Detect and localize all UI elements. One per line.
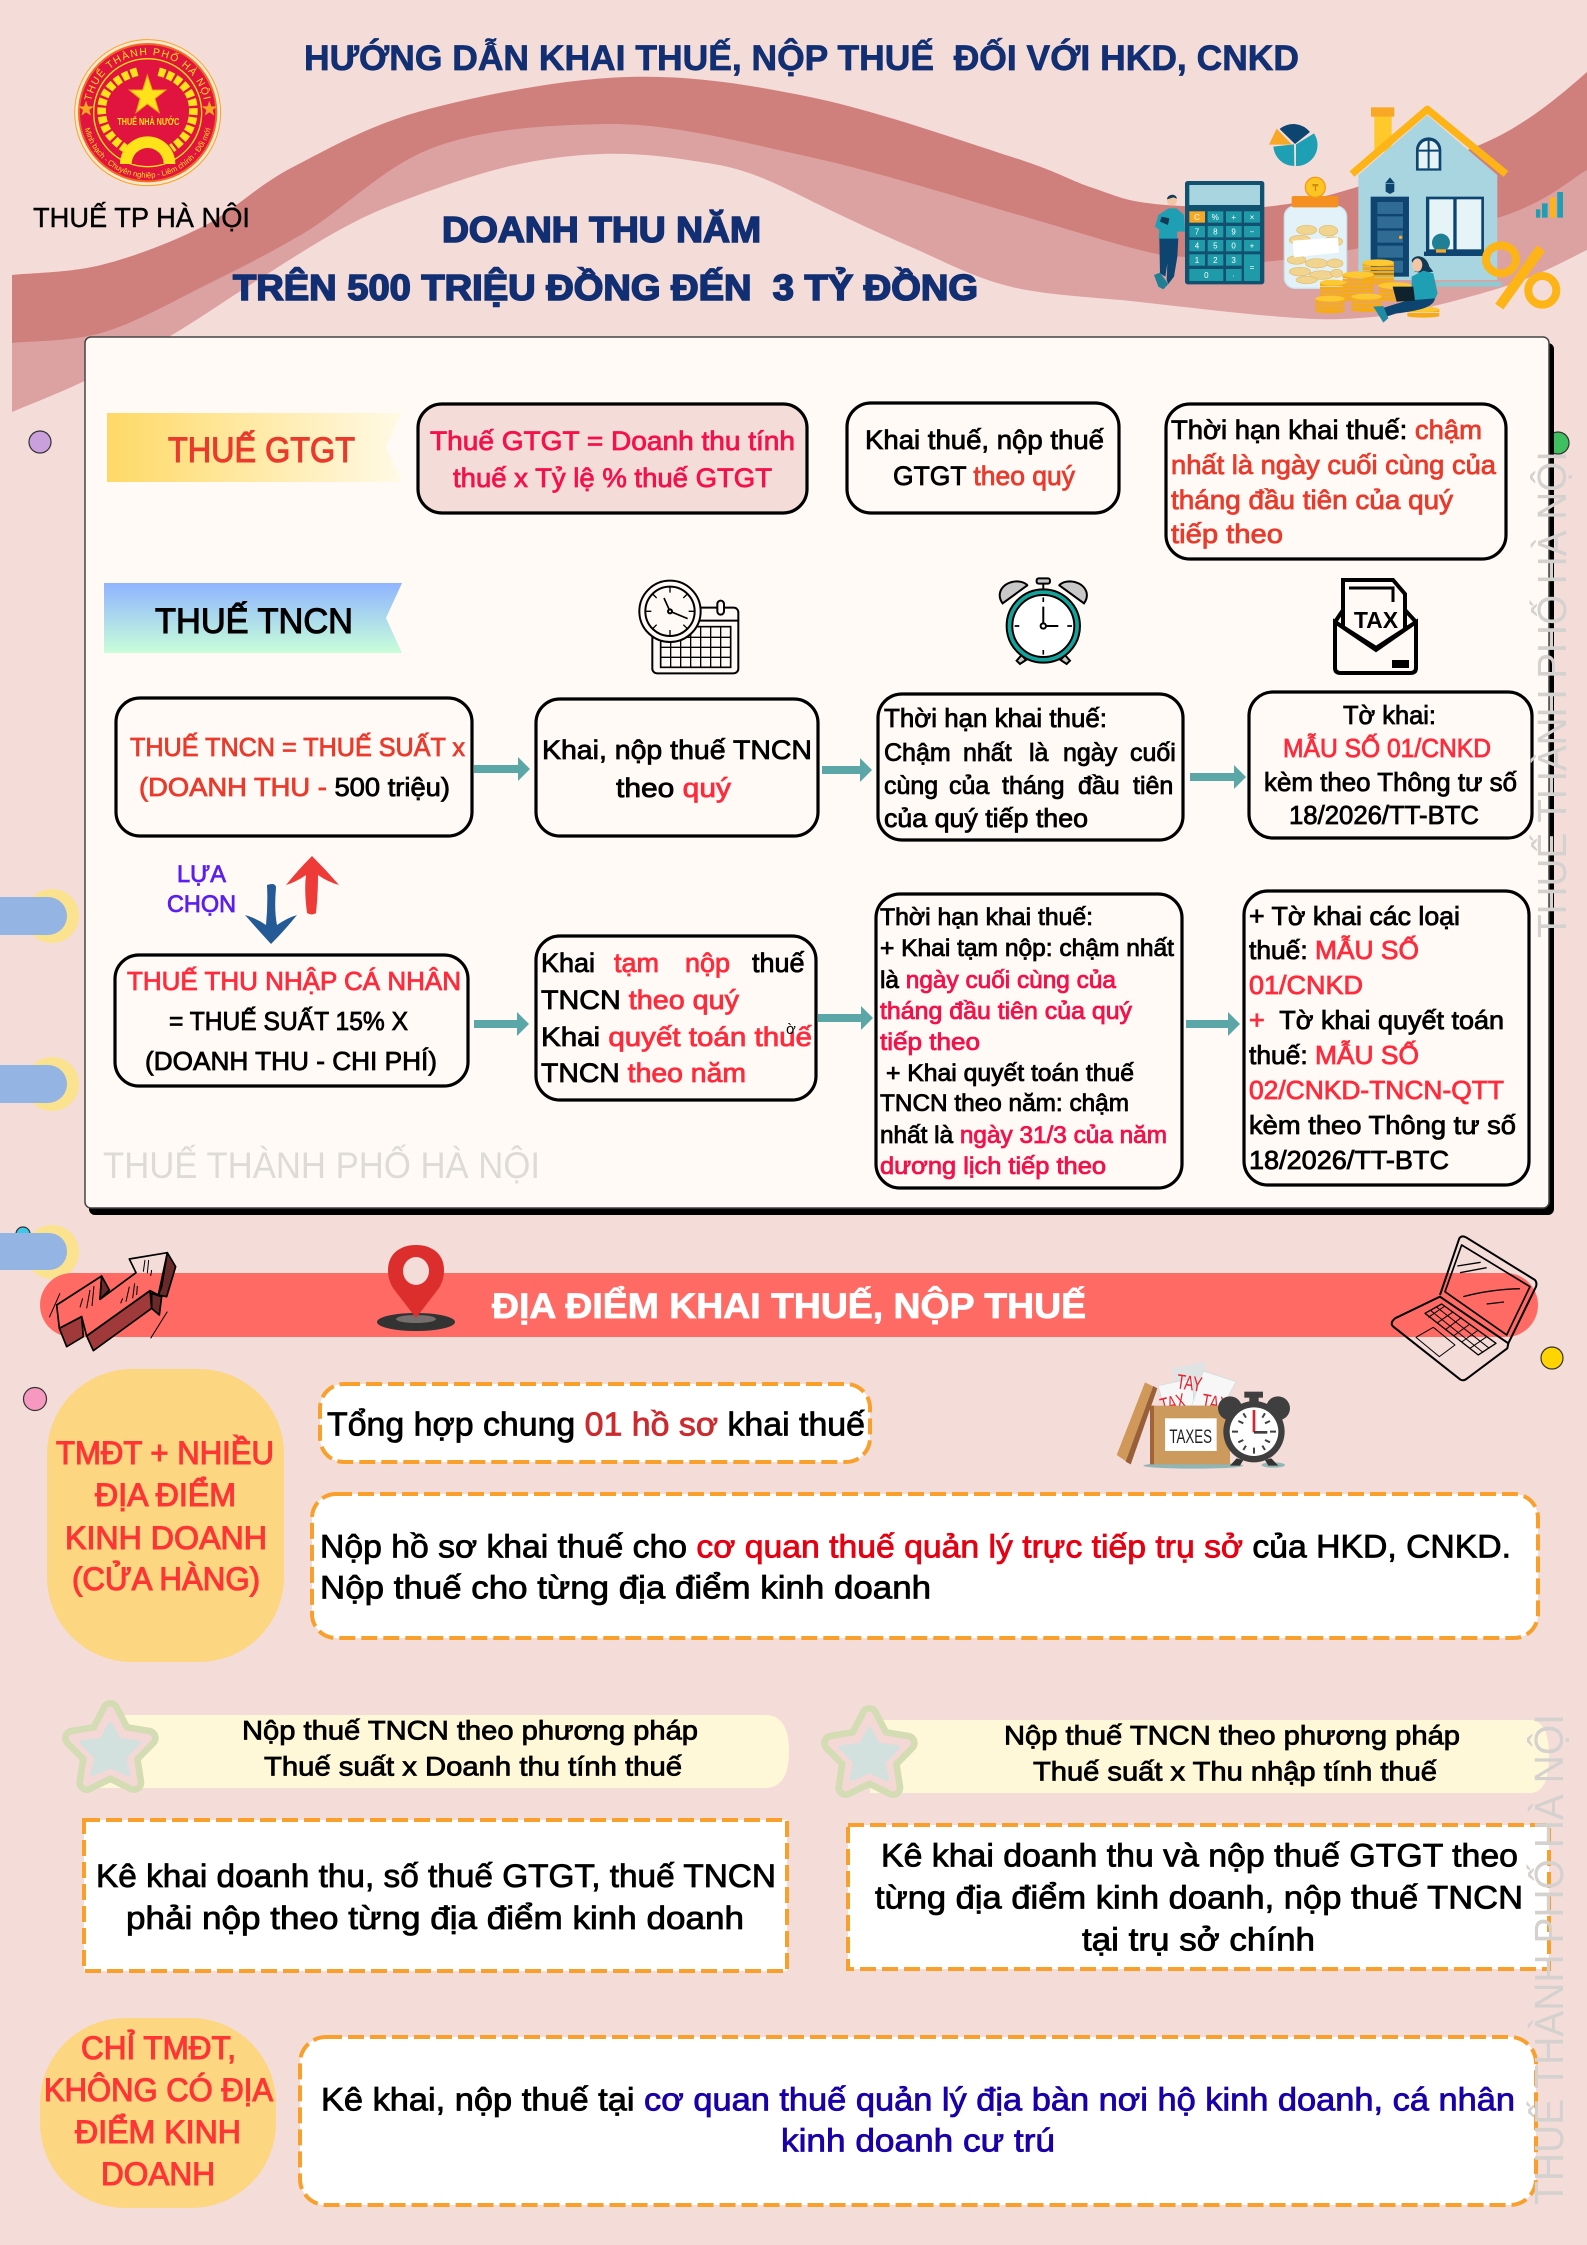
icon: man with phone xyxy=(1154,195,1185,289)
icon: tax envelope: TAX xyxy=(1354,607,1399,633)
box: khai thuế GTGT theo quý xyxy=(847,403,1119,513)
box: nộp hồ sơ khai thuế: Nộp hồ sơ khai thuế cho cơ quan thuế quản lý trực tiếp trụ sở của HKD, CNKD. xyxy=(320,1528,1511,1564)
box: tờ khai 01/CNKD: Tờ khai: xyxy=(1343,700,1436,730)
box: khai nộp TNCN theo quý xyxy=(536,699,818,836)
subtitle: DOANH THU NĂM xyxy=(442,209,761,250)
logo: Thuế thành phố Hà Nội emblem: THUẾ THÀNH PHỐ HÀ NỘI xyxy=(84,48,211,100)
arrow xyxy=(1186,1012,1240,1036)
subtitle: TRÊN 500 TRIỆU ĐỒNG ĐẾN 3 TỶ ĐỒNG xyxy=(233,266,978,308)
icon: calculator: 8 xyxy=(1213,228,1218,237)
box: tờ khai các loại thuế: thuế: MẪU SỐ xyxy=(1249,935,1419,965)
pill: chỉ TMĐT xyxy=(40,2018,276,2208)
box: thời hạn khai TNCN: ngày xyxy=(1063,739,1118,767)
box: thời hạn tạm nộp và quyết toán: Thời hạn khai thuế: xyxy=(880,904,1093,931)
icon: calculator: 9 xyxy=(1231,228,1236,237)
box: thời hạn khai TNCN: Thời hạn khai thuế: xyxy=(884,703,1107,733)
box: kê khai tại nơi cư trú: kinh doanh cư trú xyxy=(781,2122,1055,2158)
arrow xyxy=(1190,765,1246,789)
box: kê khai theo từng địa điểm: phải nộp theo từng địa điểm kinh doanh xyxy=(126,1900,744,1936)
box: thời hạn tạm nộp và quyết toán: + Khai quyết toán thuế xyxy=(886,1060,1135,1087)
box: khai thuế GTGT theo quý: GTGT theo quý xyxy=(893,461,1075,491)
icon: star xyxy=(831,1715,907,1788)
icon: taxes box and clock xyxy=(1117,1362,1290,1469)
box: thời hạn tạm nộp và quyết toán: tiếp theo xyxy=(880,1029,980,1056)
box: thời hạn tạm nộp và quyết toán: TNCN theo năm: chậm xyxy=(880,1090,1129,1117)
icon: coin jar xyxy=(1284,177,1347,288)
icon: house xyxy=(1352,107,1506,287)
watermark vertical: THUẾ THÀNH PHỐ HÀ NỘI xyxy=(1529,451,1575,938)
box: khai nộp TNCN theo quý: theo quý xyxy=(616,773,732,803)
box: tờ khai các loại thuế: 18/2026/TT-BTC xyxy=(1249,1145,1449,1175)
box: thời hạn khai TNCN: tiên xyxy=(1133,772,1173,800)
box: kê khai theo từng địa điểm xyxy=(84,1820,787,1971)
box: tờ khai các loại thuế xyxy=(1244,891,1529,1185)
box: công thức thuế GTGT xyxy=(418,404,807,513)
box: thời hạn tạm nộp và quyết toán: nhất là ngày 31/3 của năm xyxy=(880,1122,1167,1149)
box: thời hạn khai TNCN: của xyxy=(949,772,989,800)
box: thời hạn khai TNCN: tháng xyxy=(1002,772,1065,800)
banner: địa điểm khai thuế: ĐỊA ĐIỂM KHAI THUẾ, NỘP THUẾ xyxy=(492,1286,1086,1326)
side tabs xyxy=(0,889,79,1279)
box: khai tạm nộp, quyết toán: TNCN theo quý xyxy=(541,985,740,1015)
ribbon: THUẾ TNCN xyxy=(104,583,402,653)
box: thời hạn khai thuế GTGT: tháng đầu tiên của quý xyxy=(1171,485,1454,515)
banner: thuế suất x thu nhập: Nộp thuế TNCN theo phương pháp xyxy=(1004,1720,1460,1750)
watermark in panel: THUẾ THÀNH PHỐ HÀ NỘI xyxy=(103,1144,540,1186)
icon: location pin xyxy=(377,1245,455,1331)
box: công thức TNCN theo doanh thu: (DOANH THU - 500 triệu) xyxy=(139,772,450,802)
box: kê khai GTGT, TNCN tại trụ sở: Kê khai doanh thu và nộp thuế GTGT theo xyxy=(881,1838,1518,1874)
box: thời hạn tạm nộp và quyết toán: là ngày cuối cùng của xyxy=(880,967,1117,994)
box: tờ khai 01/CNKD: 18/2026/TT-BTC xyxy=(1289,800,1479,830)
pill: TMĐT + nhiều địa điểm: ĐỊA ĐIỂM xyxy=(95,1477,236,1513)
icon: calculator: . xyxy=(1233,270,1235,279)
wave background xyxy=(12,72,1587,520)
box: khai tạm nộp, quyết toán xyxy=(536,936,816,1100)
box: tờ khai các loại thuế: thuế: MẪU SỐ xyxy=(1249,1040,1419,1070)
box: khai nộp TNCN theo quý: Khai, nộp thuế TNCN xyxy=(542,735,812,765)
box: kê khai tại nơi cư trú: Kê khai, nộp thuế tại cơ quan thuế quản lý địa bàn nơi hộ kinh doanh, cá nhân xyxy=(321,2082,1515,2118)
banner: thuế suất x thu nhập: Thuế suất x Thu nhập tính thuế xyxy=(1033,1756,1437,1786)
ribbon: THUẾ GTGT xyxy=(107,413,402,482)
box: thời hạn tạm nộp và quyết toán xyxy=(876,894,1182,1188)
arrow xyxy=(474,1012,529,1036)
banner: thuế suất x doanh thu xyxy=(72,1710,789,1788)
icon: coin jar: ₸ xyxy=(1312,183,1318,193)
icon: calculator: − xyxy=(1250,228,1255,237)
watermark vertical lower: THUẾ THÀNH PHỐ HÀ NỘI xyxy=(1526,1714,1572,2205)
label: lựa chọn xyxy=(167,861,236,918)
box: công thức TNCN theo doanh thu: THUẾ TNCN = THUẾ SUẤT x xyxy=(130,732,465,762)
box: công thức thuế GTGT: Thuế GTGT = Doanh thu tính xyxy=(430,426,795,456)
box: thời hạn khai thuế GTGT: nhất là ngày cuối cùng của xyxy=(1171,450,1497,480)
icon: taxes box and clock: TAY xyxy=(1175,1370,1204,1397)
main title: HƯỚNG DẪN KHAI THUẾ, NỘP THUẾ ĐỐI VỚI HKD, CNKD xyxy=(304,38,1299,78)
arrow xyxy=(818,1006,873,1030)
box: kê khai theo từng địa điểm: Kê khai doanh thu, số thuế GTGT, thuế TNCN xyxy=(96,1858,776,1894)
box: tổng hợp chung 01 hồ sơ xyxy=(320,1384,870,1462)
icon: calculator: C xyxy=(1194,213,1200,222)
icon: red up arrow xyxy=(286,856,339,914)
box: tờ khai các loại thuế: + Tờ khai quyết toán xyxy=(1249,1005,1504,1035)
box: thời hạn khai thuế GTGT: tiếp theo xyxy=(1171,519,1283,549)
box: thời hạn khai TNCN: Chậm xyxy=(884,739,951,767)
icon: calculator: + xyxy=(1231,213,1236,222)
illustration: house, calculator, coins xyxy=(1154,107,1563,323)
icon: calculator: 7 xyxy=(1195,228,1200,237)
box: kê khai GTGT, TNCN tại trụ sở xyxy=(848,1825,1549,1969)
pill: chỉ TMĐT: CHỈ TMĐT, xyxy=(81,2030,236,2066)
box: tờ khai 01/CNKD: kèm theo Thông tư số xyxy=(1264,767,1517,797)
box: kê khai GTGT, TNCN tại trụ sở: từng địa điểm kinh doanh, nộp thuế TNCN xyxy=(875,1880,1523,1916)
box: công thức TNCN theo doanh thu xyxy=(116,698,472,836)
icon: sketched arrow xyxy=(49,1253,176,1351)
icon: taxes box and clock: TAXES xyxy=(1169,1427,1212,1448)
arrow xyxy=(822,758,872,782)
logo: Thuế thành phố Hà Nội emblem xyxy=(74,39,222,186)
icon: alarm clock xyxy=(1000,578,1087,664)
box: khai tạm nộp, quyết toán: TNCN theo năm xyxy=(541,1058,746,1088)
icon: small bar chart xyxy=(1536,192,1563,218)
pill: chỉ TMĐT: KHÔNG CÓ ĐỊA xyxy=(44,2072,274,2108)
icon: woman with laptop xyxy=(1373,256,1438,323)
icon: pie chart xyxy=(1269,124,1318,166)
main panel xyxy=(85,337,1554,1215)
icon: calculator: × xyxy=(1250,213,1255,222)
box: khai tạm nộp, quyết toán: thuế xyxy=(752,948,805,978)
logo: Thuế thành phố Hà Nội emblem: Minh bạch - Chuyên nghiệp - Liêm chính - Đổi mới xyxy=(84,128,210,180)
icon: taxes box and clock: TAX xyxy=(1200,1390,1230,1417)
box: thời hạn khai TNCN: nhất xyxy=(963,739,1012,767)
banner: thuế suất x thu nhập xyxy=(831,1715,1549,1793)
ribbon: THUẾ GTGT: THUẾ GTGT xyxy=(168,430,355,470)
box: thuế thu nhập cá nhân: = THUẾ SUẤT 15% X xyxy=(169,1006,408,1036)
icon: calculator: 5 xyxy=(1213,242,1218,251)
box: kê khai tại nơi cư trú xyxy=(300,2037,1536,2205)
box: thuế thu nhập cá nhân: THUẾ THU NHẬP CÁ NHÂN xyxy=(127,966,461,996)
label: lựa chọn: LỰA xyxy=(177,861,226,888)
ribbon: THUẾ TNCN: THUẾ TNCN xyxy=(155,601,353,641)
box: tổng hợp chung 01 hồ sơ: Tổng hợp chung 01 hồ sơ khai thuế xyxy=(327,1406,865,1442)
box: khai tạm nộp, quyết toán: Khai xyxy=(541,948,595,978)
organisation name: THUẾ TP HÀ NỘI xyxy=(33,202,250,233)
box: tờ khai các loại thuế: kèm theo Thông tư số xyxy=(1249,1110,1516,1140)
box: tờ khai 01/CNKD: MẪU SỐ 01/CNKD xyxy=(1283,733,1491,763)
icon: percent sign xyxy=(1486,245,1556,307)
box: công thức thuế GTGT: thuế x Tỷ lệ % thuế GTGT xyxy=(453,463,772,493)
logo: Thuế thành phố Hà Nội emblem: THUẾ NHÀ NƯỚC xyxy=(117,116,179,128)
label: lựa chọn: CHỌN xyxy=(167,891,236,918)
subtitle xyxy=(233,209,978,308)
box: nộp hồ sơ khai thuế xyxy=(312,1494,1538,1638)
box: kê khai GTGT, TNCN tại trụ sở: tại trụ sở chính xyxy=(1082,1922,1315,1958)
box: thời hạn khai TNCN: của quý tiếp theo xyxy=(884,803,1088,833)
box: thời hạn khai thuế GTGT: Thời hạn khai thuế: chậm xyxy=(1171,415,1482,445)
icon: calculator: 3 xyxy=(1231,256,1236,265)
box: khai tạm nộp, quyết toán: nộp xyxy=(685,948,730,978)
box: thời hạn khai TNCN: cùng xyxy=(884,772,938,800)
box: tờ khai 01/CNKD xyxy=(1249,692,1532,838)
banner: thuế suất x doanh thu: Nộp thuế TNCN theo phương pháp xyxy=(242,1716,698,1746)
icon: clock and calendar xyxy=(639,581,738,673)
box: tờ khai các loại thuế: 02/CNKD-TNCN-QTT xyxy=(1249,1075,1504,1105)
box: thời hạn khai TNCN: đầu xyxy=(1078,772,1120,800)
box: thời hạn khai thuế GTGT xyxy=(1166,404,1506,559)
icon: tax envelope xyxy=(1335,580,1416,673)
icon: calculator: 1 xyxy=(1195,256,1200,265)
box: thuế thu nhập cá nhân xyxy=(115,955,468,1086)
icon: blue down arrow xyxy=(245,884,297,944)
box: khai thuế GTGT theo quý: Khai thuế, nộp thuế xyxy=(865,425,1104,455)
banner: thuế suất x doanh thu: Thuế suất x Doanh thu tính thuế xyxy=(264,1752,682,1782)
icon: laptop xyxy=(1392,1236,1536,1380)
box: thời hạn khai TNCN xyxy=(878,694,1183,840)
icon: taxes box and clock: TAX xyxy=(1158,1389,1188,1418)
pill: TMĐT + nhiều địa điểm xyxy=(47,1369,284,1662)
box: tờ khai các loại thuế: + Tờ khai các loại xyxy=(1249,901,1460,931)
pill: chỉ TMĐT: DOANH xyxy=(101,2156,215,2192)
pill: chỉ TMĐT: ĐIỂM KINH xyxy=(75,2114,241,2150)
box: khai tạm nộp, quyết toán: tạm xyxy=(614,948,659,978)
icon: star xyxy=(72,1710,148,1783)
icon: coin stacks xyxy=(1315,259,1439,318)
icon: calculator: + xyxy=(1250,242,1255,251)
icon: calculator: = xyxy=(1250,263,1255,272)
box: thời hạn khai TNCN: cuối xyxy=(1130,739,1176,767)
banner: địa điểm khai thuế xyxy=(40,1273,1538,1337)
icon: calculator: % xyxy=(1212,213,1219,222)
box: tờ khai các loại thuế: 01/CNKD xyxy=(1249,970,1363,1000)
pill: TMĐT + nhiều địa điểm: KINH DOANH xyxy=(65,1520,267,1556)
pill: TMĐT + nhiều địa điểm: (CỬA HÀNG) xyxy=(72,1561,260,1597)
box: thời hạn tạm nộp và quyết toán: tháng đầu tiên của quý xyxy=(880,998,1132,1025)
icon: calculator: 4 xyxy=(1195,242,1200,251)
pill: TMĐT + nhiều địa điểm: TMĐT + NHIỀU xyxy=(56,1435,274,1471)
decorative dots xyxy=(16,431,1569,1410)
box: thời hạn khai TNCN: là xyxy=(1029,739,1049,767)
arrow xyxy=(474,757,530,781)
box: thuế thu nhập cá nhân: (DOANH THU - CHI PHÍ) xyxy=(145,1046,437,1076)
icon: calculator: 0 xyxy=(1204,271,1209,280)
box: khai tạm nộp, quyết toán: Khai quyết toán thuế xyxy=(541,1022,812,1052)
icon: calculator xyxy=(1185,181,1264,284)
box: thời hạn tạm nộp và quyết toán: dương lịch tiếp theo xyxy=(880,1153,1106,1180)
box: khai tạm nộp, quyết toán: ờ xyxy=(786,1021,796,1038)
box: nộp hồ sơ khai thuế: Nộp thuế cho từng địa điểm kinh doanh xyxy=(320,1570,931,1606)
icon: calculator: 0 xyxy=(1231,242,1236,251)
box: thời hạn tạm nộp và quyết toán: + Khai tạm nộp: chậm nhất xyxy=(880,935,1174,962)
icon: calculator: 2 xyxy=(1213,256,1218,265)
